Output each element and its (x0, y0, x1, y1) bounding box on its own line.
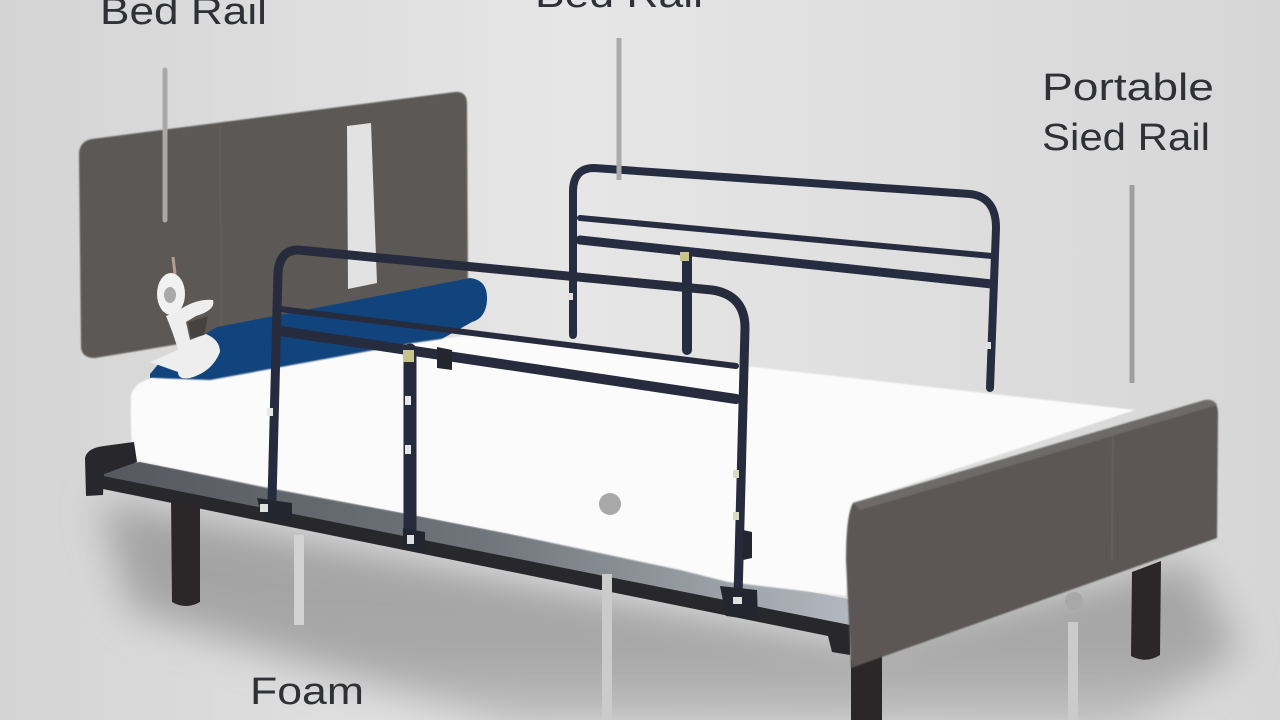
far leg (171, 498, 200, 606)
footboard (846, 400, 1218, 668)
label: foam: Foam (250, 671, 364, 713)
leader: left bed rail (162, 70, 168, 220)
leader: far bed rail (616, 38, 622, 180)
floor shadow (100, 500, 1240, 720)
leader lines (165, 38, 1132, 720)
leader: centre (602, 574, 612, 720)
near leg (851, 652, 882, 720)
platform deck (103, 462, 853, 628)
far side rail (573, 168, 996, 388)
headboard paper label (347, 123, 377, 289)
frame front bar (103, 476, 850, 655)
base frame hook (85, 442, 137, 496)
rail brackets and fittings (257, 252, 991, 620)
leader: right (1068, 622, 1078, 720)
label: portable side rail: Portable (1042, 67, 1214, 109)
mattress (131, 335, 1135, 596)
leader: foam (294, 535, 304, 625)
baby monitor clip (150, 257, 220, 378)
near side rail (272, 250, 745, 598)
leader: portable side rail (1130, 185, 1134, 383)
leader dot: right (1065, 592, 1083, 610)
right leg (1131, 561, 1161, 660)
leader dot: centre (599, 493, 621, 515)
label: portable side rail: Sied Rail (1042, 117, 1210, 159)
bolster pillow (150, 278, 487, 382)
headboard (79, 92, 468, 358)
